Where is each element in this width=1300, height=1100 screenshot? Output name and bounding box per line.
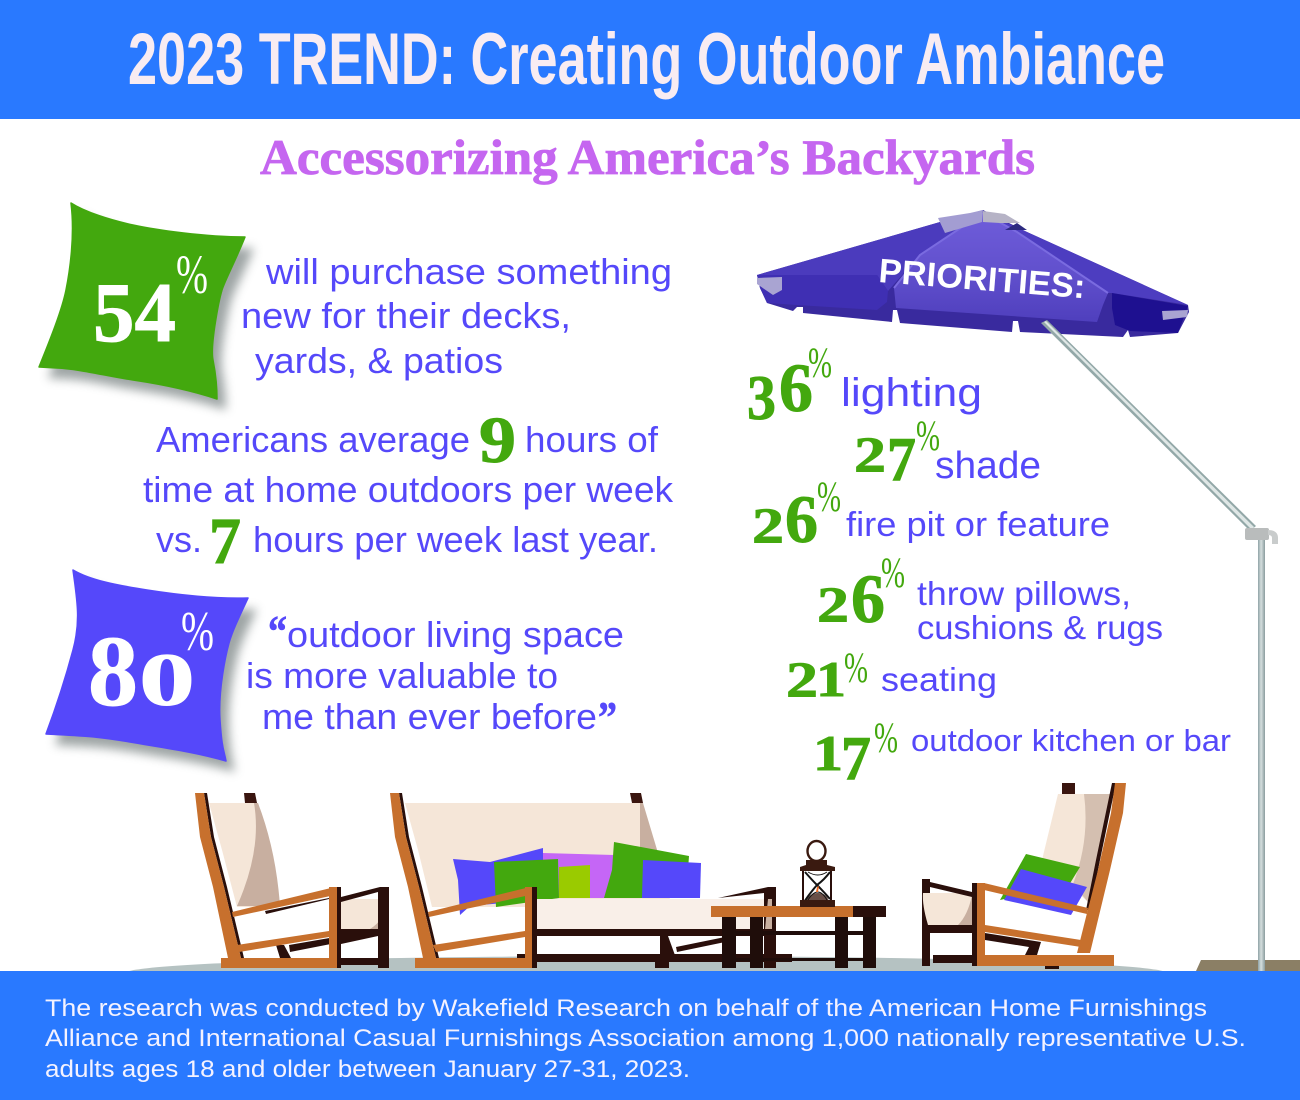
priority: outdoor kitchen 17 percent: 1: [813, 725, 843, 781]
header band: [0, 0, 1300, 119]
text: hours outdoors: [143, 404, 674, 578]
priority: outdoor kitchen 17 percent: [813, 715, 1231, 793]
stat: 54 percent green pillow: 54: [93, 266, 176, 360]
priority: lighting 36 percent: 6: [779, 350, 813, 426]
text: quote: ”: [598, 693, 617, 742]
priority: throw pillows 26 percent: 2: [817, 576, 849, 632]
ground ellipse: [126, 956, 1166, 990]
text: will purchase: [241, 251, 672, 381]
subtitle: Accessorizing America’s Backyards: [260, 129, 1035, 185]
priority: fire pit 26 percent: [752, 474, 1110, 557]
stat: 80 percent blue pillow: %: [181, 601, 214, 663]
priority: throw pillows 26 percent: %: [881, 550, 905, 597]
footer text: [45, 995, 1246, 1083]
priority: outdoor kitchen 17 percent: outdoor kitchen or bar: [911, 723, 1231, 758]
umbrella label: PRIORITIES:: [877, 252, 1087, 306]
lantern: [800, 841, 835, 907]
text: hours outdoors: Americans average: [156, 419, 470, 460]
sofa pillows: [453, 842, 701, 915]
text: quote: is more valuable to: [246, 655, 558, 696]
sofa: [390, 793, 792, 968]
stat: 80 percent blue pillow: 8: [88, 615, 138, 727]
priority: fire pit 26 percent: fire pit or feature: [846, 506, 1110, 544]
left armchair: [195, 793, 389, 968]
priority: shade 27 percent: 7: [887, 426, 916, 494]
stat: 54 percent green pillow: %: [176, 244, 208, 305]
priority: shade 27 percent: 2: [854, 426, 886, 482]
text: quote: [246, 607, 624, 742]
coffee table: [711, 906, 886, 968]
priority: outdoor kitchen 17 percent: 7: [841, 725, 871, 793]
text: hours outdoors: 7: [209, 505, 241, 578]
umbrella canopy: [757, 210, 1189, 337]
priority: fire pit 26 percent: 2: [752, 497, 784, 553]
priority: lighting 36 percent: [747, 340, 982, 433]
priority: lighting 36 percent: lighting: [841, 371, 982, 415]
text: quote: me than ever before: [262, 696, 597, 737]
priority: seating 21 percent: %: [844, 645, 868, 692]
priority: shade 27 percent: shade: [935, 445, 1041, 487]
text: hours outdoors: time at home outdoors per week: [143, 469, 674, 510]
stat: 54 percent green pillow: [39, 203, 254, 410]
right armchair: [922, 783, 1126, 969]
priority: seating 21 percent: 1: [816, 651, 846, 707]
umbrella pole: [1041, 320, 1300, 971]
priority: seating 21 percent: [786, 645, 997, 707]
priority: shade 27 percent: [854, 413, 1041, 494]
priority: fire pit 26 percent: %: [817, 474, 841, 521]
stat: 80 percent blue pillow: 0: [139, 639, 195, 722]
footer band: [0, 971, 1300, 1100]
footer text: The research was conducted by Wakefield Research on behalf of the American Home Furnishings: [45, 995, 1207, 1022]
footer text: adults ages 18 and older between January 27-31, 2023.: [45, 1056, 690, 1083]
priority: shade 27 percent: %: [916, 413, 940, 460]
priority: fire pit 26 percent: 6: [785, 481, 818, 557]
priority: throw pillows 26 percent: [817, 550, 1163, 646]
priority: throw pillows 26 percent: cushions & rugs: [917, 609, 1163, 646]
priority: seating 21 percent: 2: [786, 651, 818, 707]
text: quote: “: [268, 607, 287, 656]
text: hours outdoors: hours of: [525, 419, 659, 460]
stat: 80 percent blue pillow: [46, 570, 257, 772]
priority: throw pillows 26 percent: throw pillows,: [917, 575, 1131, 612]
text: hours outdoors: hours per week last year.: [253, 519, 658, 560]
text: hours outdoors: vs.: [156, 519, 202, 560]
text: will purchase: new for their decks,: [241, 295, 571, 336]
text: quote: outdoor living space: [287, 614, 624, 655]
text: will purchase: will purchase something: [265, 251, 672, 292]
priority: throw pillows 26 percent: 6: [851, 561, 885, 637]
priority: lighting 36 percent: %: [808, 340, 832, 387]
text: hours outdoors: 9: [479, 404, 516, 477]
text: will purchase: yards, & patios: [255, 340, 503, 381]
priority: outdoor kitchen 17 percent: %: [874, 715, 898, 762]
footer text: Alliance and International Casual Furnishings Association among 1,000 nationally representative U.S.: [45, 1025, 1246, 1052]
priority: lighting 36 percent: 3: [747, 362, 776, 433]
priority: seating 21 percent: seating: [881, 661, 997, 698]
